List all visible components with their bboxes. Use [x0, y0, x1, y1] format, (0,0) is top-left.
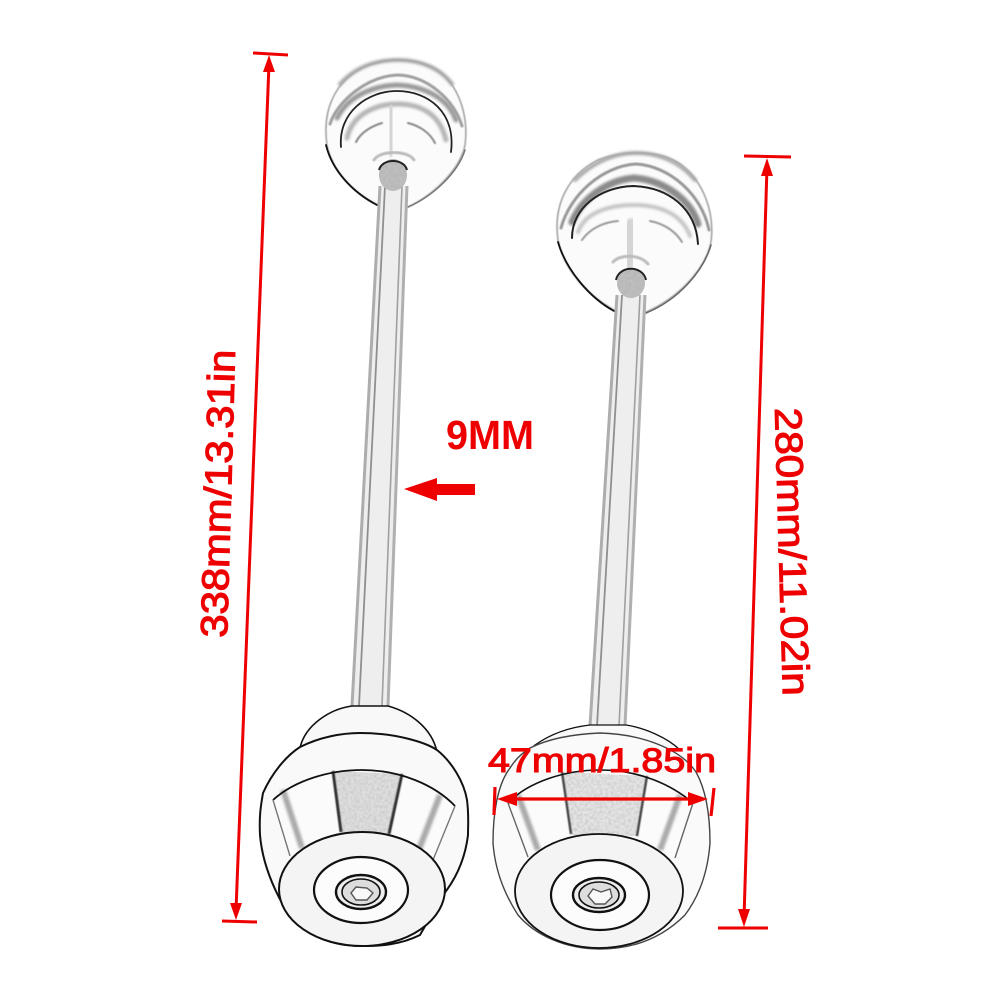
left slider washer: [314, 857, 408, 923]
dimension: 338mm overall length: [194, 53, 288, 922]
right slider washer: [551, 860, 649, 930]
right slider body: [493, 733, 710, 949]
label: 280mm: 280mm/11.02in: [766, 407, 816, 696]
left slider cone: [273, 770, 455, 860]
dimension: 47mm diameter: [488, 742, 716, 816]
arrow: pointing at rod: [404, 478, 475, 501]
right slider cone: [508, 770, 693, 858]
left slider bolt: [336, 875, 386, 909]
right slider bolt: [573, 878, 625, 912]
right slider top dome: [535, 725, 680, 750]
left small end cap: [326, 60, 466, 207]
label: 338mm: 338mm/13.31in: [194, 349, 244, 638]
right large slider: [493, 725, 710, 949]
dimension: 280mm length: [718, 156, 816, 928]
right axle rod: [590, 268, 646, 726]
left axle rod: [352, 159, 407, 706]
right small end cap: [557, 153, 712, 313]
left slider top dome: [300, 706, 437, 752]
left slider face: [279, 832, 445, 946]
label: 47mm: 47mm/1.85in: [488, 742, 716, 780]
label: 9MM rod diameter: 9MM: [446, 412, 534, 458]
left slider body: [260, 733, 468, 946]
right slider face: [515, 834, 683, 948]
left large slider: [260, 706, 468, 946]
